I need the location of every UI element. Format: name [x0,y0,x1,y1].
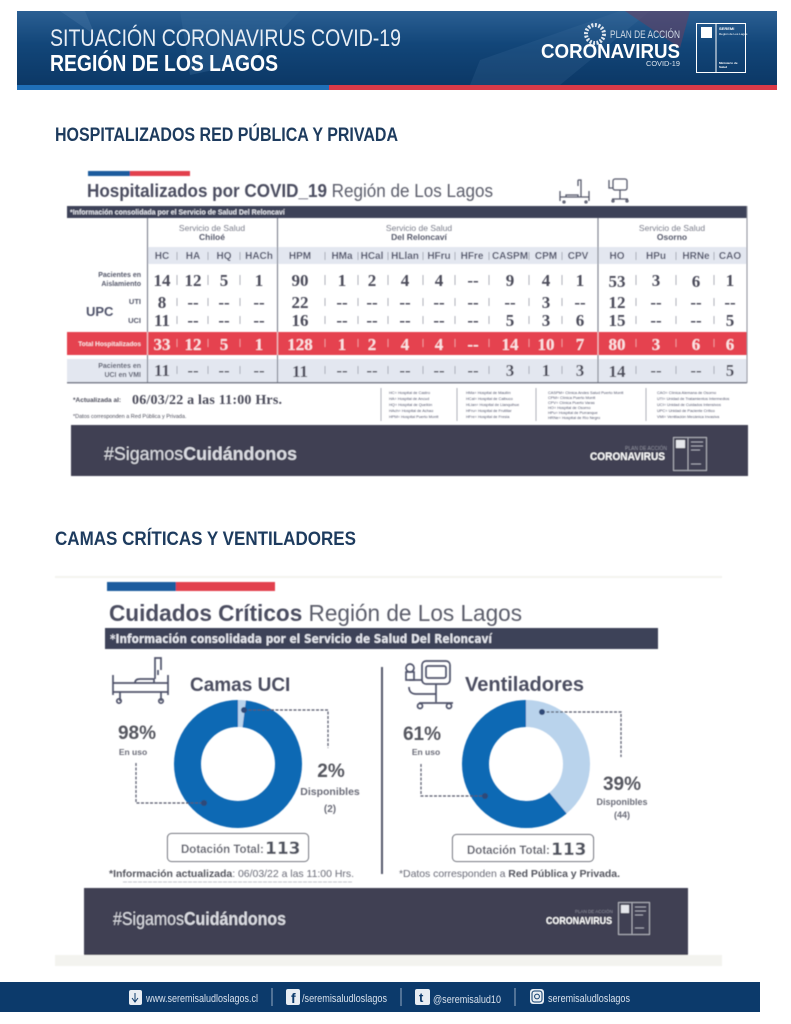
icon: ventilator small [609,179,628,202]
table row: total hospitalizados: 3 [652,335,660,354]
table row: total hospitalizados: -- [467,335,479,354]
box: dotacion total camas: 113 [265,839,300,859]
legend: HPu= Hospital de Purranque [548,410,598,415]
column headers: HC [155,251,169,262]
chart group: ventiladores [399,661,648,880]
chart group: camas UCI [109,658,360,882]
legend: HAch= Hospital de Achao [389,408,433,413]
info bar [105,628,658,649]
service headers [179,223,705,242]
callout: 2% disponibles: 2% [317,761,345,782]
divider [381,667,383,874]
row labels: UTI [129,297,141,306]
table row: UTI: -- [467,293,479,312]
callout: 39% disponibles [539,709,648,820]
column headers: HCal [361,251,384,262]
table row: pacientes en aislamiento: 90 [292,271,308,290]
table row: pacientes en aislamiento: 2 [368,271,376,290]
separators [177,252,714,374]
table row: UTI: -- [218,293,230,312]
table row: pacientes en aislamiento: 9 [506,271,514,290]
legend: HA= Hospital de Ancud [389,396,429,401]
label: camas UCI: Camas UCI [190,675,290,696]
header title: REGIÓN DE LOS LAGOS [50,49,278,76]
dark footer band: table: #SigamosCuidándonos [104,444,297,464]
legend: HFre= Hospital de Fresia [466,414,510,419]
dark footer band: table: CORONAVIRUS [590,451,665,463]
table row: UTI: -- [336,293,348,312]
table row: pacientes en aislamiento: 4 [542,271,551,290]
column headers: HRNe [682,251,710,262]
row labels: UCI [128,316,141,325]
table row: total hospitalizados: 4 [435,335,444,354]
label: ventiladores: Ventiladores [465,674,584,696]
table row: UCI: -- [336,311,348,330]
icon: facebook [286,989,300,1006]
box: dotacion total camas [168,834,308,862]
icon: hospital bed [113,658,168,703]
table row: UCI: -- [399,311,411,330]
callout: 98% en uso: En uso [119,747,147,757]
header logo: plan de accion coronavirus: PLAN DE ACCIÓN [610,28,680,41]
column headers: CAO [719,251,741,262]
table row: UCI: 11 [154,311,170,330]
table row: UCI [154,311,734,330]
table row: pacientes en aislamiento [154,271,734,291]
table row: total hospitalizados: 2 [368,335,376,354]
header logo: plan de accion coronavirus [541,25,680,68]
info bar: *Información consolidada por el Servicio de Salud Del Reloncaví [70,210,286,216]
table row: UCI: 15 [608,311,626,330]
table row: UCI: 5 [506,311,514,330]
legend: HRNe= Hospital de Río Negro [548,415,600,420]
service headers: Chiloé [199,232,225,242]
callout: 2% disponibles: Disponibles [300,786,360,798]
table row: pacientes en aislamiento: 1 [338,271,346,290]
table row: UCI: 5 [726,311,734,330]
table row: pacientes en aislamiento: -- [467,271,479,290]
legend: UPC= Unidad de Paciente Crítico [657,408,715,413]
header title [50,25,401,76]
icon: facebook: f [291,990,296,1006]
legend: HCal= Hospital de Calbuco [466,396,513,401]
heading: camas criticas y ventiladores: CAMAS CRÍTICAS Y VENTILADORES [55,528,356,550]
table row: UTI: 22 [292,293,308,312]
callout: 61% en uso: En uso [412,747,440,757]
icon: web [129,990,142,1005]
header logo: seremi crest: Ministerio de [719,61,738,65]
table row: UCI: -- [650,311,662,330]
legend: HMa= Hospital de Maullín [466,390,511,395]
table row: total hospitalizados: 10 [538,335,554,354]
table row: UCI: 6 [576,311,584,330]
table row: total hospitalizados: 7 [576,335,585,354]
table row: UTI: 12 [608,293,626,312]
legend: UCI= Unidad de Cuidados Intensivos [657,402,721,407]
legend: CPV= Clínica Puerto Varas [548,400,595,405]
column headers [155,251,741,262]
table row: UTI: -- [433,293,445,312]
callout: 61% en uso: 61% [403,724,441,745]
table row: total hospitalizados: 12 [184,335,202,354]
donut chart: camas UCI 98% [188,714,288,814]
legend: CPM= Clínica Puerto Montt [548,395,596,400]
dark footer band: cuidados criticos: CORONAVIRUS [546,915,612,927]
header logo: seremi crest [696,24,748,72]
table row: total hospitalizados: 1 [255,335,263,354]
column headers: HA [186,251,200,262]
callout: 2% disponibles: (2) [324,804,336,815]
callout: 39% disponibles: Disponibles [596,797,648,807]
box: dotacion total ventiladores [452,834,594,862]
facebook handle: /seremisaludloslagos [302,993,387,1005]
callout: 61% en uso [403,724,488,799]
panel title: Cuidados Críticos Región de Los Lagos [109,600,522,626]
column headers: HACh [245,251,273,262]
column headers: HPu [646,251,666,262]
table row: UTI: -- [574,293,586,312]
note: informacion actualizada: *Información actualizada: 06/03/22 a las 11:00 Hrs. [109,868,354,880]
dark footer band: table: PLAN DE ACCIÓN [625,445,667,452]
table row: pacientes en UCI en VMI: -- [187,361,199,380]
table row: pacientes en UCI en VMI: -- [433,361,445,380]
panel: cuidados criticos [55,576,722,966]
box: dotacion total ventiladores: 113 [551,840,586,860]
column headers: HMa [331,251,353,262]
table row: total hospitalizados [154,335,734,354]
icon: twitter [415,989,430,1005]
table row: pacientes en UCI en VMI: 11 [154,361,170,380]
table row: UTI: 8 [158,293,166,312]
legend: HC= Hospital de Castro [389,390,430,395]
table row: pacientes en aislamiento: 1 [255,271,263,290]
table row: pacientes en UCI en VMI: -- [366,361,378,380]
header logo: plan de accion coronavirus: CORONAVIRUS [541,41,680,63]
footer contact bar [0,982,760,1012]
legend: VMI= Ventilación Mecánica Invasiva [657,414,720,419]
icon: twitter: t [419,990,424,1005]
table row: UTI: -- [253,293,265,312]
column headers: HLlan [391,251,419,262]
table row: UTI: -- [690,293,702,312]
table row: total hospitalizados: 5 [220,335,228,354]
table row: pacientes en UCI en VMI: -- [218,361,230,380]
legend: HQ= Hospital de Quellón [389,402,432,407]
header logo: seremi crest: Región de Los Lagos [719,32,748,36]
table row: UCI: -- [187,311,199,330]
table row: UCI: 3 [542,311,550,330]
update note: *Actualizada al: [73,397,121,404]
table row: pacientes en aislamiento: 1 [576,271,584,290]
twitter handle: @seremisalud10 [433,994,501,1006]
table row: UCI: -- [433,311,445,330]
row labels: UCI en VMI [104,372,141,379]
legend [381,388,729,421]
table row: UCI: 16 [292,311,308,330]
callout: 39% disponibles: (44) [614,810,630,820]
box: dotacion total camas: Dotación Total: [181,844,264,856]
table row: UTI: -- [366,293,378,312]
table row: UTI: -- [650,293,662,312]
table row: pacientes en UCI en VMI: 3 [576,361,584,380]
table row: total hospitalizados: 6 [692,335,700,354]
panel accent stripe [88,171,190,176]
legend: CASPM= Clínica Andes Salud Puerto Montt [548,390,624,395]
icon: bed small [560,180,589,203]
update note: 06/03/22 a las 11:00 Hrs. [132,393,282,408]
table row: UTI: -- [724,293,736,312]
row labels: Pacientes en [98,363,141,370]
donut chart: ventiladores 61% [476,714,576,814]
row labels: Pacientes en [98,272,141,279]
legend: HLlan= Hospital de Llanquihue [466,402,519,407]
dark footer band: table [71,425,748,476]
column headers: HFru [427,251,451,262]
callout: 98% en uso: 98% [118,723,156,744]
service headers: Osorno [657,232,687,242]
table row: total hospitalizados: 33 [154,335,170,354]
website: www.seremisaludloslagos.cl [145,993,258,1005]
table row: pacientes en UCI en VMI: -- [690,361,702,380]
table row: UCI: -- [218,311,230,330]
column headers: CPV [568,251,589,262]
table row: UCI: -- [253,311,265,330]
header logo: seremi crest: SEREMI [719,26,734,31]
legend: HFru= Hospital de Frutillar [466,408,512,413]
panel title: Hospitalizados por COVID_19 Región de Los Lagos [87,181,493,201]
table row: pacientes en aislamiento: 3 [652,271,660,290]
table row: pacientes en aislamiento: 53 [608,272,626,291]
callout: 39% disponibles: 39% [603,774,641,795]
dark footer band: cuidados criticos [84,888,688,955]
table row: pacientes en UCI en VMI: 14 [608,362,626,381]
table row: pacientes en UCI en VMI: 11 [292,362,308,381]
label UPC: UPC [86,304,114,319]
legend: UTI= Unidad de Tratamientos Intermedios [657,396,729,401]
panel accent stripe [107,582,275,591]
table row: UTI [158,293,736,312]
table row: pacientes en aislamiento: 12 [184,271,202,290]
row labels [78,272,141,379]
bands [148,247,747,264]
table row: pacientes en UCI en VMI: 3 [506,361,514,380]
table row: pacientes en UCI en VMI: 5 [726,361,734,380]
callout: 98% en uso [118,723,207,806]
table row: pacientes en aislamiento: 6 [692,272,700,291]
table row: total hospitalizados: 4 [401,335,410,354]
legend: HPM= Hospital Puerto Montt [389,414,439,419]
header title: SITUACIÓN CORONAVIRUS COVID-19 [50,25,401,52]
row labels: Aislamiento [101,281,141,288]
dark footer band: cuidados criticos: #SigamosCuidándonos [113,909,286,929]
service headers: Del Reloncaví [391,232,448,242]
table row: pacientes en UCI en VMI: -- [650,361,662,380]
table row: pacientes en aislamiento: 4 [435,271,444,290]
icon: instagram [530,989,544,1004]
column headers: HPM [289,251,311,262]
callout: 2% disponibles [241,707,360,815]
table row: pacientes en UCI en VMI: -- [336,361,348,380]
header banner [17,11,777,90]
column headers: HQ [216,251,232,262]
service headers: Servicio de Salud [179,223,245,233]
box: dotacion total ventiladores: Dotación Total: [467,845,550,857]
info bar [67,206,747,218]
dark footer band: cuidados criticos: PLAN DE ACCIÓN [575,908,613,914]
table row: pacientes en UCI en VMI: -- [467,361,479,380]
table row: pacientes en UCI en VMI: -- [399,361,411,380]
update note: *Datos corresponden a Red Pública y Privada. [73,414,187,420]
table row: total hospitalizados: 128 [287,335,313,354]
table row: pacientes en UCI en VMI: -- [253,361,265,380]
table row: UCI: -- [690,311,702,330]
table row: pacientes en aislamiento: 14 [154,271,171,290]
table row: total hospitalizados: 6 [726,335,734,354]
instagram handle: seremisaludloslagos [548,993,630,1005]
info bar: *Información consolidada por el Servicio de Salud Del Reloncaví [110,631,493,646]
column headers: CASPM [492,251,528,262]
note: datos corresponden: *Datos corresponden a Red Pública y Privada. [399,868,620,880]
panel: hospitalizados table [67,171,748,476]
table row: pacientes en aislamiento: 5 [220,271,228,290]
table row: UTI: -- [187,293,199,312]
table row: total hospitalizados: 80 [608,335,626,354]
header logo: plan de accion coronavirus: COVID-19 [646,59,680,68]
table row: UCI: -- [467,311,479,330]
table row: UTI: 3 [542,293,550,312]
column headers: HFre [461,251,484,262]
row labels: Total Hospitalizados [78,341,141,348]
legend: CAO= Clínica Alemana de Osorno [657,390,716,395]
table row: pacientes en UCI en VMI: 1 [542,361,550,380]
table row: pacientes en aislamiento: 1 [726,271,734,290]
service headers: Servicio de Salud [639,223,705,233]
header logo: seremi crest: Salud [719,65,727,69]
table row: pacientes en aislamiento: 4 [401,271,410,290]
service headers: Servicio de Salud [386,223,452,233]
update note [73,393,282,420]
table row: UTI: -- [504,293,516,312]
table row: pacientes en UCI en VMI [154,361,734,381]
heading: hospitalizados: HOSPITALIZADOS RED PÚBLICA Y PRIVADA [55,124,398,146]
column headers: CPM [535,251,557,262]
table row: total hospitalizados: 14 [502,335,519,354]
table row: total hospitalizados: 1 [338,335,346,354]
table row: UTI: -- [399,293,411,312]
column headers: HO [610,251,625,262]
table row: UCI: -- [366,311,378,330]
legend: HO= Hospital de Osorno [548,405,590,410]
icon: ventilator [406,661,453,708]
